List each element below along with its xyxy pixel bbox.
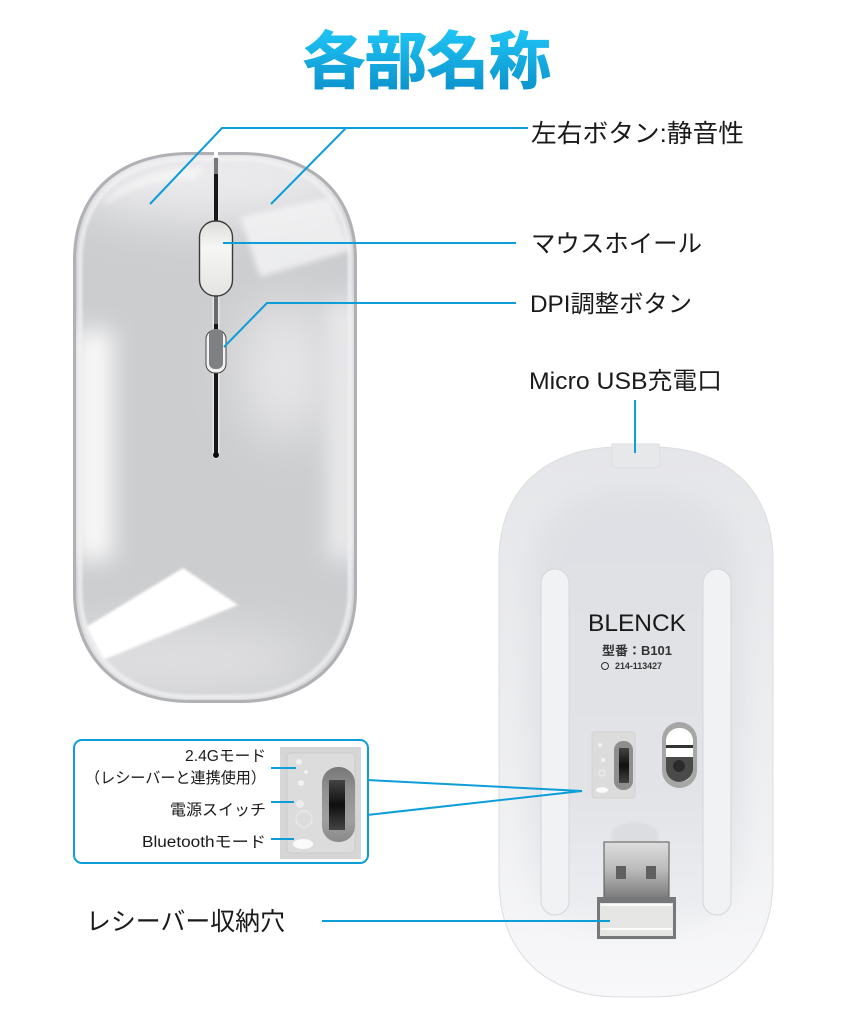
label: receiver slot: レシーバー収納穴 (86, 908, 285, 936)
DPI button (206, 329, 226, 373)
leader line: DPI button (224, 303, 516, 347)
scroll slot (212, 152, 220, 459)
leader line: mouse wheel (223, 242, 516, 244)
brand: BLENCK (588, 610, 686, 637)
label: mouse wheel: マウスホイール (531, 231, 702, 258)
scroll wheel (200, 221, 232, 296)
leader line: Micro USB port (634, 400, 636, 453)
switch close-up (280, 747, 361, 859)
charging port flap (612, 444, 660, 468)
label: DPI button: DPI調整ボタン (530, 291, 692, 318)
USB receiver (597, 822, 676, 939)
leader lines: left and right buttons (150, 128, 528, 204)
left foot pad (541, 569, 569, 915)
switch detail callout (74, 740, 368, 863)
leader lines: switch detail (367, 780, 582, 815)
mode label: Bluetooth: Bluetoothモード (142, 834, 266, 851)
mode switch (592, 732, 635, 798)
sensor window (662, 722, 697, 788)
mode label: power switch: 電源スイッチ (170, 801, 266, 819)
bottom view mouse (499, 444, 773, 997)
label: left and right buttons: 左右ボタン:静音性 (531, 120, 744, 148)
model number: 型番：B101 (602, 644, 672, 658)
title: 各部名称 (303, 28, 551, 97)
right foot pad (703, 569, 731, 915)
mode pointers (271, 768, 296, 839)
certification number: 214-113427 (615, 661, 662, 671)
mode label: receiver use: （レシーバーと連携使用） (85, 769, 266, 787)
mode label: 2.4G: 2.4Gモード (185, 748, 266, 765)
top view mouse (73, 152, 357, 703)
leader line: receiver slot (322, 920, 610, 922)
label: Micro USB port: Micro USB充電口 (529, 368, 722, 395)
